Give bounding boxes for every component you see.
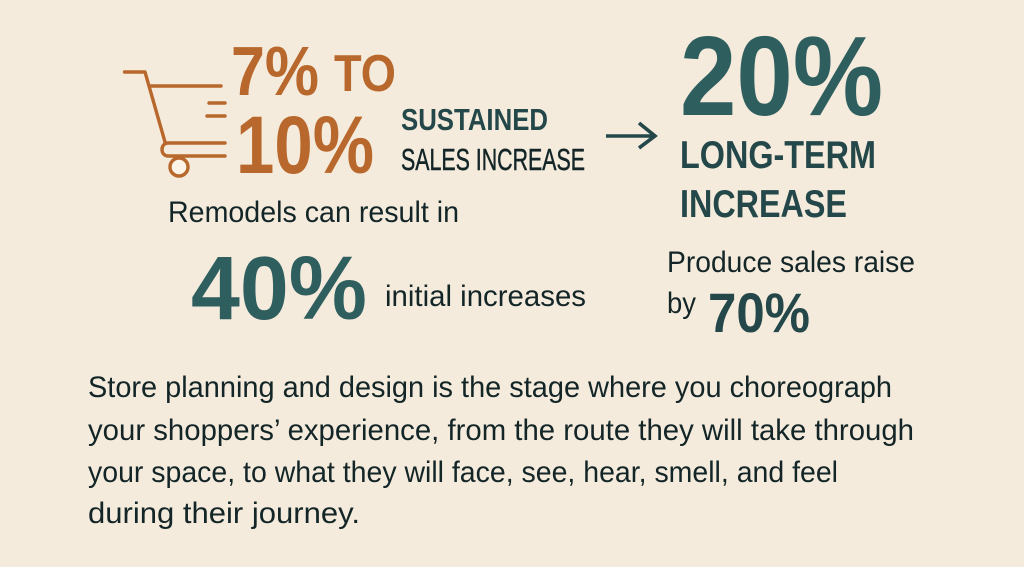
- body paragraph: your space, to what they will face, see, hear, smell, and feel: [88, 456, 838, 489]
- body paragraph: [88, 371, 914, 530]
- body paragraph: Store planning and design is the stage where you choreograph: [88, 371, 892, 404]
- icon: shopping cart: [124, 72, 225, 176]
- body paragraph: your shoppers’ experience, from the route they will take through: [88, 414, 914, 447]
- body paragraph: during their journey.: [88, 497, 360, 530]
- label: long-term increase: LONG-TERM: [680, 134, 876, 177]
- label: sustained sales increase: SUSTAINED: [401, 102, 548, 137]
- stat: 20%: 20%: [680, 13, 883, 139]
- stat: 10%: 10%: [236, 100, 374, 191]
- label: sustained sales increase: SALES INCREASE: [401, 142, 585, 177]
- label: long-term increase: [680, 134, 876, 226]
- stat: 7% to: TO: [334, 45, 396, 103]
- text: produce sales raise by 70%: Produce sales raise: [667, 246, 915, 279]
- stat: 7% to: [231, 32, 396, 110]
- arrow: [606, 123, 655, 148]
- stat: 40%: 40%: [191, 239, 367, 339]
- text: produce sales raise by 70%: [667, 246, 915, 344]
- text: produce sales raise by 70%: 70%: [708, 281, 810, 344]
- text: initial increases: initial increases: [385, 280, 586, 313]
- label: long-term increase: INCREASE: [680, 183, 847, 226]
- text: produce sales raise by 70%: by: [667, 287, 696, 320]
- label: sustained sales increase: [401, 102, 585, 177]
- text: remodels: Remodels can result in: [168, 196, 459, 229]
- stat: 7% to: 7%: [231, 32, 319, 110]
